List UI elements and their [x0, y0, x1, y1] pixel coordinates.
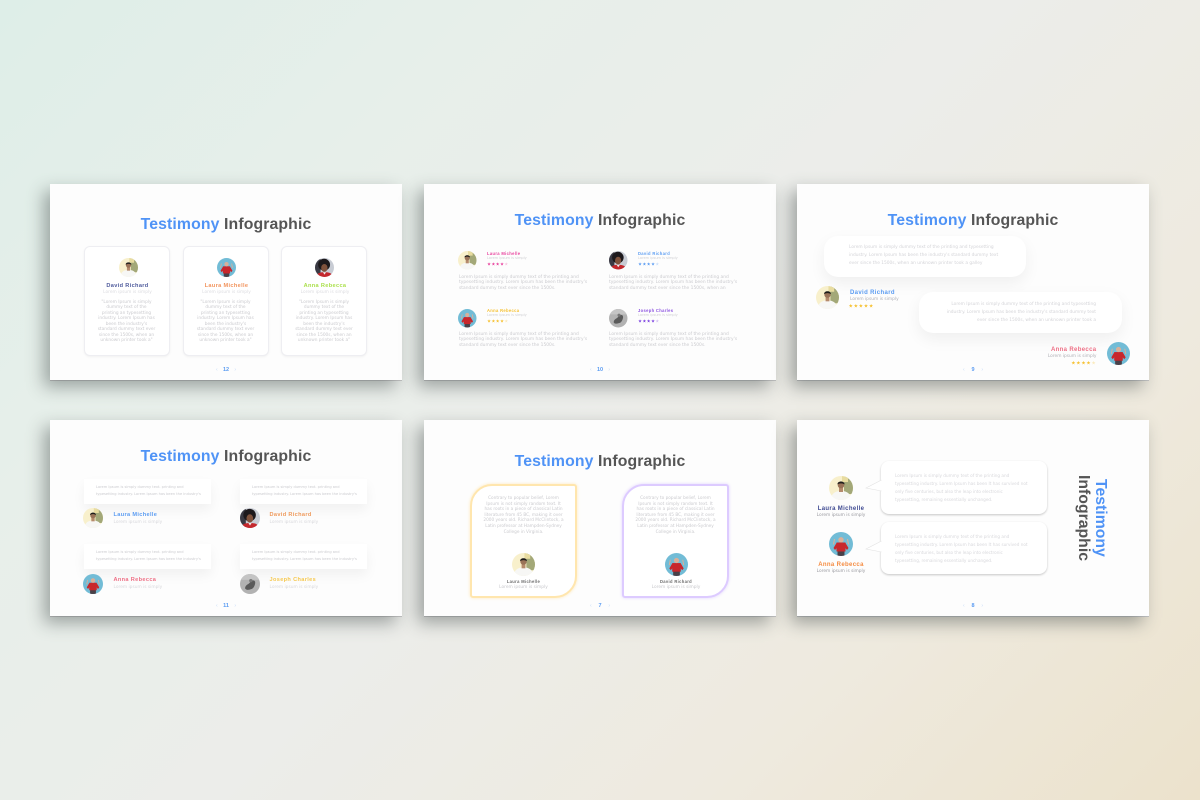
panel: slide 10, four rated testimonials — [424, 184, 776, 380]
text: Lorem Ipsum is simply dummy text. printing and — [96, 550, 184, 554]
text — [96, 485, 201, 496]
text — [947, 302, 1096, 323]
text — [895, 533, 1028, 565]
name: David Richard — [270, 512, 312, 518]
text: Lorem Ipsum is simply dummy text of the printing and typesetting — [951, 302, 1096, 307]
quote: Latin professor at Hampden-Sydney — [637, 524, 714, 529]
testimonial: Anna Rebecca — [458, 307, 587, 348]
heading: Testimony Infographic — [515, 212, 685, 229]
page number: 11 — [223, 603, 229, 609]
quote: has roots in a piece of classical Latin — [484, 507, 563, 512]
role: Lorem ipsum is simply — [817, 512, 865, 517]
stars: ★★★★★ — [638, 319, 660, 324]
quote: printing an typesetting — [102, 310, 151, 316]
avatar — [1107, 342, 1130, 365]
page number: ‹ — [216, 367, 218, 373]
quote: has roots in a piece of classical Latin — [636, 507, 715, 512]
role: Lorem ipsum is simply — [499, 585, 548, 590]
page number — [590, 367, 610, 373]
text: standard dummy text ever since the 1500s, when an — [609, 286, 726, 291]
page number — [216, 367, 236, 373]
quote — [472, 496, 575, 535]
stars: ★★★★★ — [487, 262, 509, 267]
bubble tail — [866, 540, 882, 556]
text: standard dummy text ever since the 1500s. — [459, 286, 556, 291]
avatar — [609, 309, 628, 328]
quote box — [84, 544, 211, 569]
text: standard dummy text ever since the 1500s. — [459, 343, 556, 348]
quote: industry. Lorem Ipsum has — [296, 316, 352, 321]
page number: ‹ — [963, 603, 965, 609]
card: Laura Michelle — [470, 484, 577, 598]
text: typesetting industry. Lorem Ipsum has been the industry's — [609, 337, 737, 342]
quote: been the industry's — [106, 322, 147, 326]
avatar — [829, 532, 853, 556]
quote: since the 1500s, when an — [296, 332, 352, 338]
name: Anna Rebecca — [304, 283, 346, 289]
stars: ★★★★★ — [487, 319, 509, 324]
page number: 12 — [223, 367, 229, 373]
page number: ‹ — [590, 367, 592, 373]
role: Lorem ipsum is simply — [202, 290, 251, 295]
text — [96, 549, 201, 563]
text: only five centuries, but also the leap into electronic — [895, 489, 1003, 494]
quote: since the 1500s, when an — [99, 332, 154, 338]
testimonial: David Richard — [609, 250, 737, 291]
text: typesetting industry. Lorem Ipsum has been It has survived not — [895, 542, 1028, 547]
stars: ★★★★★ — [1071, 360, 1096, 366]
page number: ‹ — [216, 603, 218, 609]
quote: "Lorem Ipsum is simply — [299, 300, 349, 304]
avatar — [83, 574, 103, 594]
panel: slide 9, speech pills — [797, 184, 1149, 380]
page number: 7 — [598, 603, 602, 609]
text: only five centuries, but also the leap into electronic — [895, 550, 1003, 555]
page number: › — [981, 603, 983, 609]
speech pill: right — [919, 292, 1122, 333]
text — [895, 472, 1028, 504]
name: David Richard — [850, 290, 895, 296]
text: typesetting industry. Lorem Ipsum has been the industry's — [252, 557, 357, 561]
role: Lorem ipsum is simply — [487, 313, 527, 317]
quote: standard dummy text ever — [295, 327, 353, 332]
page number: › — [608, 367, 610, 373]
name: Laura Michelle — [818, 506, 864, 512]
testimonial: Laura Michelle — [83, 485, 206, 528]
text: Lorem Ipsum is simply dummy text of the printing and — [609, 332, 729, 336]
quote: 2000 years old. Richard McClintock, a — [635, 518, 716, 523]
quote: "Lorem Ipsum is simply — [200, 300, 251, 304]
text: ever since the 1500s, when an unknown printer took a galley — [849, 261, 982, 266]
page number: › — [234, 603, 236, 609]
role: Lorem ipsum is simply — [638, 313, 678, 317]
name: David Richard — [660, 579, 692, 584]
page number: 9 — [971, 367, 975, 373]
quote box — [84, 479, 211, 504]
avatar — [458, 251, 476, 270]
avatar — [315, 258, 334, 277]
text: Lorem Ipsum is simply dummy text. printing and — [252, 485, 340, 489]
avatar — [664, 552, 688, 576]
page number — [584, 601, 616, 612]
speech bubble: top — [881, 461, 1047, 514]
quote: Ipsum is not simply random text. It — [638, 502, 713, 507]
quote: unknown printer took a" — [199, 338, 252, 343]
quote: industry. Lorem Ipsum has — [197, 316, 254, 321]
role: Lorem ipsum is simply — [652, 585, 700, 590]
testimonial: Laura Michelle — [458, 250, 587, 291]
text: typesetting industry. Lorem Ipsum has been the industry's — [609, 280, 737, 285]
quote: Contrary to popular belief, Lorem — [640, 496, 711, 501]
panel: slide 11, quote boxes with names — [50, 420, 402, 616]
quote: standard dummy text ever — [197, 327, 254, 332]
role: Lorem ipsum is simply — [638, 256, 678, 260]
quote: College in Virginia. — [504, 530, 543, 535]
profile: Laura Michelle — [815, 476, 867, 519]
avatar — [458, 309, 476, 328]
quote: standard dummy text ever — [98, 327, 155, 332]
quote — [624, 496, 727, 535]
name: Anna Rebecca — [1051, 346, 1096, 352]
quote: Ipsum is not simply random text. It — [486, 502, 561, 507]
avatar — [83, 508, 103, 528]
testimonial: Joseph Charles — [240, 544, 368, 594]
quote: dummy text of the — [304, 305, 344, 310]
text: typesetting industry. Lorem Ipsum has been the industry's — [96, 492, 201, 496]
quote: been the industry's — [303, 322, 345, 326]
page number — [963, 367, 983, 373]
quote: literature from 45 BC, making it over — [636, 513, 715, 518]
testimonial: David Richard — [240, 485, 362, 528]
text: Lorem Ipsum is simply dummy text of the printing and — [895, 534, 1009, 539]
name: Anna Rebecca — [818, 562, 864, 568]
text: Lorem Ipsum is simply dummy text of the printing and — [895, 473, 1009, 478]
role: Lorem ipsum is simply — [114, 585, 162, 590]
quote: College in Virginia. — [656, 530, 695, 535]
page number: 8 — [971, 603, 975, 609]
quote: dummy text of the — [106, 305, 147, 310]
avatar — [829, 476, 853, 500]
avatar — [119, 258, 138, 277]
avatar — [609, 251, 628, 270]
panel: slide 8, speech bubbles and vertical title — [797, 420, 1149, 616]
name: Laura Michelle — [205, 283, 248, 289]
quote — [197, 300, 254, 343]
role: Lorem ipsum is simply — [301, 290, 349, 295]
heading: Testimony Infographic — [141, 216, 311, 233]
role: Lorem ipsum is simply — [103, 290, 152, 295]
page number: › — [981, 367, 983, 373]
name: Anna Rebecca — [114, 577, 156, 583]
role: Lorem ipsum is simply — [850, 297, 899, 302]
text: ever since the 1500s, when an unknown printer took a — [977, 318, 1096, 323]
quote box — [240, 479, 367, 504]
page number: ‹ — [590, 603, 592, 609]
quote: unknown printer took a" — [100, 338, 153, 343]
text: Lorem Ipsum is simply dummy text of the printing and — [609, 274, 729, 280]
bubble tail — [866, 479, 882, 495]
vertical heading — [1069, 470, 1109, 566]
quote: Contrary to popular belief, Lorem — [488, 496, 559, 501]
name: Laura Michelle — [487, 250, 520, 255]
page number: ‹ — [963, 367, 965, 373]
card: David Richard — [84, 246, 170, 356]
quote: literature from 45 BC, making it over — [484, 513, 563, 518]
quote — [295, 300, 353, 343]
text: Lorem Ipsum is simply dummy text of the printing and — [459, 274, 579, 280]
text — [252, 484, 357, 498]
text: typesetting industry. Lorem Ipsum has been the industry's — [459, 337, 587, 342]
speech bubble: bottom — [881, 522, 1047, 574]
text: typesetting industry. Lorem Ipsum has been the industry's — [459, 280, 587, 285]
text — [459, 332, 587, 348]
name: Laura Michelle — [507, 579, 540, 584]
text — [609, 274, 737, 291]
text: Lorem Ipsum is simply dummy text. printing and — [252, 550, 340, 554]
card: Laura Michelle — [182, 246, 268, 356]
avatar — [217, 258, 236, 277]
quote: printing an typesetting — [299, 310, 349, 316]
name: David Richard — [106, 283, 149, 289]
vertical heading: Infographic — [1075, 475, 1092, 561]
text: typesetting industry. Lorem Ipsum has been It has survived not — [895, 481, 1028, 486]
text: Lorem Ipsum is simply dummy text of the printing and — [459, 332, 579, 336]
role: Lorem ipsum is simply — [487, 256, 527, 260]
quote: 2000 years old. Richard McClintock, a — [483, 518, 564, 523]
quote: industry. Lorem Ipsum has — [98, 316, 155, 321]
text: typesetting, remaining essentially unchanged. — [895, 558, 992, 563]
text — [459, 274, 587, 291]
quote: since the 1500s, when an — [198, 332, 253, 338]
avatar — [816, 286, 839, 309]
speech pill: top left — [824, 236, 1026, 277]
role: Lorem ipsum is simply — [270, 585, 318, 590]
text: typesetting industry. Lorem Ipsum has been the industry's — [252, 492, 357, 496]
text — [252, 549, 357, 563]
quote: Latin professor at Hampden-Sydney — [485, 524, 562, 529]
testimonial: Anna Rebecca — [83, 544, 211, 594]
card: Anna Rebecca — [281, 246, 367, 356]
stars: ★★★★★ — [848, 304, 874, 310]
page number — [957, 601, 989, 612]
quote: dummy text of the — [205, 305, 246, 310]
panel: slide 7, outlined leaf cards — [424, 420, 776, 616]
role: Lorem ipsum is simply — [1048, 353, 1096, 358]
text — [609, 332, 737, 348]
heading: Testimony Infographic — [515, 453, 685, 470]
testimonial: David Richard — [816, 286, 899, 310]
role: Lorem ipsum is simply — [270, 520, 318, 525]
card: David Richard — [622, 484, 729, 598]
page number: › — [234, 367, 236, 373]
panel: slide 12, three testimonial cards — [50, 184, 402, 380]
role: Lorem ipsum is simply — [817, 568, 865, 573]
testimonial: Joseph Charles — [609, 307, 737, 348]
heading: Testimony Infographic — [888, 212, 1058, 229]
avatar — [240, 508, 260, 528]
page number: › — [608, 603, 610, 609]
text: typesetting industry. Lorem Ipsum has been the industry's — [96, 557, 201, 561]
page number: 10 — [597, 367, 603, 373]
name: Joseph Charles — [270, 577, 316, 583]
quote: printing an typesetting — [201, 310, 250, 316]
text: Lorem Ipsum is simply dummy text of the printing and typesetting — [849, 245, 994, 250]
quote — [98, 300, 156, 343]
name: David Richard — [638, 250, 670, 255]
name: Laura Michelle — [114, 512, 157, 518]
role: Lorem ipsum is simply — [114, 520, 162, 525]
text: industry. Lorem Ipsum has been the industry's standard dummy text — [849, 253, 998, 258]
quote box — [240, 544, 367, 569]
text — [849, 244, 998, 266]
text: standard dummy text ever since the 1500s. — [609, 343, 706, 348]
vertical heading: Testimony — [1092, 479, 1109, 557]
text: Lorem Ipsum is simply dummy text. printing and — [96, 485, 184, 489]
testimonial: Anna Rebecca — [1048, 342, 1130, 366]
stars: ★★★★★ — [638, 262, 660, 267]
quote: "Lorem Ipsum is simply — [101, 300, 152, 304]
name: Joseph Charles — [638, 307, 673, 312]
quote: unknown printer took a" — [298, 338, 350, 343]
avatar — [240, 574, 260, 594]
text: typesetting, remaining essentially unchanged. — [895, 497, 992, 502]
avatar — [512, 552, 535, 576]
text: industry. Lorem Ipsum has been the industry's standard dummy text — [947, 310, 1096, 315]
profile: Anna Rebecca — [815, 532, 867, 575]
name: Anna Rebecca — [487, 307, 519, 312]
heading: Testimony Infographic — [141, 448, 311, 465]
quote: been the industry's — [205, 322, 246, 326]
page number — [210, 601, 242, 612]
